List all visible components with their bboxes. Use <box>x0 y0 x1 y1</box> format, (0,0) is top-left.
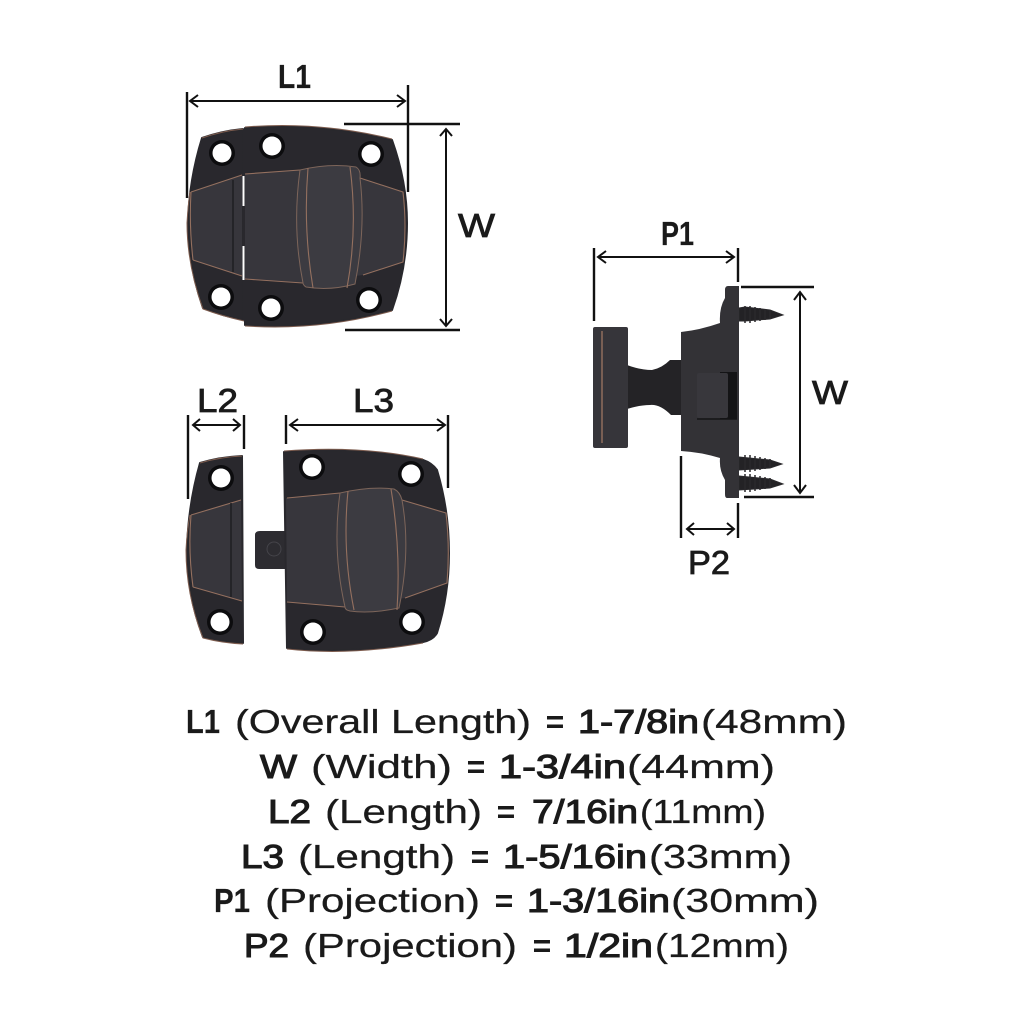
L3 line: (33mm) <box>649 838 792 875</box>
dimension list <box>186 703 847 964</box>
left strike plate <box>187 129 244 321</box>
P1 line: (30mm) <box>671 882 819 919</box>
dimension W, front view: W <box>458 207 496 244</box>
mounting holes <box>208 133 384 321</box>
P2 line: 1/2in <box>564 927 653 964</box>
L2 line: L2 <box>268 793 311 830</box>
L2 line: 7/16in <box>532 793 638 830</box>
dimension P1 <box>594 215 738 321</box>
W line: (44mm) <box>627 748 775 785</box>
L1 line: (48mm) <box>701 703 847 740</box>
L3 line: L3 <box>241 838 284 875</box>
dimension W, front view <box>344 124 496 330</box>
dimension W, side view: W <box>812 374 849 411</box>
mounting plate and body <box>681 286 739 498</box>
W line: 1-3/4in <box>499 748 626 785</box>
dimension P1: P1 <box>661 215 694 252</box>
L1 line: 1-7/8in <box>578 703 699 740</box>
L3 line: (Length) <box>298 838 455 875</box>
dimension W, side view <box>741 287 849 497</box>
dimension L3: L3 <box>353 382 394 419</box>
turn knob <box>297 166 362 288</box>
dimension L2 <box>188 382 244 499</box>
dimension L1: L1 <box>278 58 311 95</box>
L2 line: = <box>497 793 515 830</box>
square knob profile <box>593 327 628 448</box>
assembled latch, front view <box>187 126 407 327</box>
P2 line <box>244 927 789 964</box>
L2 line: (11mm) <box>640 793 766 830</box>
W line: W <box>260 748 298 785</box>
L1 line <box>186 703 847 740</box>
dimension P2 <box>681 456 738 581</box>
P2 line: (Projection) <box>303 927 517 964</box>
L3 line <box>241 838 792 875</box>
L3 line: 1-5/16in <box>503 838 647 875</box>
separated turn knob <box>337 488 406 612</box>
dimension P2: P2 <box>688 544 730 581</box>
dimension L2: L2 <box>197 382 238 419</box>
P1 line <box>214 882 819 919</box>
bolt tab <box>255 531 286 569</box>
wood screws <box>739 306 783 492</box>
W line <box>260 748 775 785</box>
P2 line: (12mm) <box>655 927 789 964</box>
P1 line: P1 <box>214 882 250 919</box>
seam between plates <box>242 176 244 280</box>
P1 line: 1-3/16in <box>527 882 670 919</box>
separated strike plate <box>186 456 243 644</box>
L2 line: (Length) <box>325 793 482 830</box>
L3 line: = <box>471 838 489 875</box>
L1 line: (Overall Length) <box>235 703 531 740</box>
L1 line: = <box>546 703 564 740</box>
separated main plate <box>284 449 449 651</box>
dimension L1 <box>187 58 408 198</box>
P1 line: (Projection) <box>265 882 480 919</box>
L1 line: L1 <box>186 703 220 740</box>
W line: (Width) <box>311 748 452 785</box>
main latch plate <box>245 126 407 327</box>
separated latch, front view <box>186 449 449 651</box>
latch side view <box>593 286 783 498</box>
P2 line: = <box>533 927 551 964</box>
sliding bolt <box>697 372 737 419</box>
L2 line <box>268 793 766 830</box>
P1 line: = <box>495 882 513 919</box>
separated mounting holes <box>207 454 425 645</box>
dimension L3 <box>286 382 448 488</box>
neck of the knob <box>627 360 681 415</box>
P2 line: P2 <box>244 927 289 964</box>
W line: = <box>467 748 485 785</box>
